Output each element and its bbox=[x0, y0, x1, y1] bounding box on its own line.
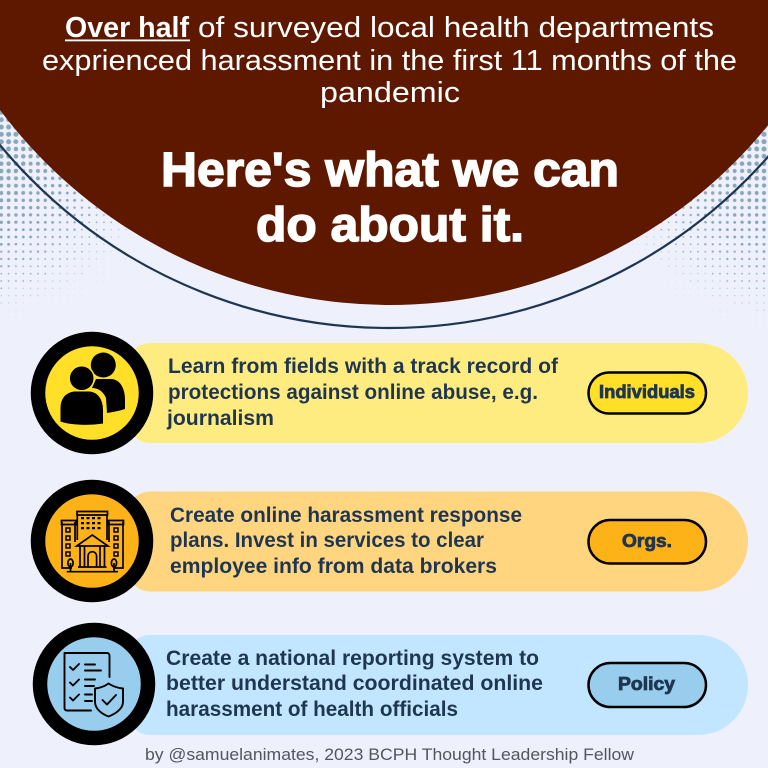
badge: Orgs bbox=[588, 520, 706, 564]
panel background bbox=[128, 343, 748, 443]
panel: orgs bbox=[38, 487, 748, 595]
text: policy action: harassment of health officials bbox=[166, 698, 458, 721]
text: individuals action: Learn from fields with a track record of bbox=[168, 355, 559, 378]
badge: Orgs: Orgs. bbox=[622, 531, 672, 551]
header statement: pandemic bbox=[320, 77, 460, 109]
panel background bbox=[128, 492, 748, 592]
header statement: Over half bbox=[65, 12, 190, 44]
text: policy action bbox=[166, 647, 543, 721]
header statement: of surveyed local health departments bbox=[198, 12, 714, 44]
text: orgs action: Create online harassment response bbox=[170, 504, 522, 527]
header statement: exprienced harassment in the first 11 months of the bbox=[42, 45, 737, 77]
main heading: do about it. bbox=[256, 199, 524, 252]
navy arc line bbox=[0, 0, 768, 328]
main heading bbox=[161, 144, 619, 252]
panel background bbox=[128, 635, 748, 735]
text: individuals action: protections against online abuse, e.g. bbox=[168, 381, 538, 404]
badge: Policy bbox=[588, 663, 706, 707]
text: orgs action: plans. Invest in services to clear bbox=[170, 529, 484, 552]
panel: policy bbox=[40, 630, 748, 738]
footer credit: by @samuelanimates, 2023 BCPH Thought Leadership Fellow bbox=[145, 745, 635, 764]
text: orgs action: employee info from data brokers bbox=[170, 555, 497, 578]
text: individuals action: journalism bbox=[166, 407, 274, 430]
text: policy action: Create a national reporting system to bbox=[166, 647, 539, 670]
halftone dots: left bbox=[0, 0, 188, 328]
brown header shape bbox=[0, 0, 768, 305]
panel: individuals bbox=[38, 339, 748, 447]
text: orgs action bbox=[170, 504, 522, 578]
header statement bbox=[42, 12, 737, 109]
text: policy action: better understand coordinated online bbox=[166, 672, 543, 695]
badge: Individuals: Individuals bbox=[599, 382, 695, 402]
text: individuals action bbox=[166, 355, 559, 430]
halftone dots: right bbox=[580, 0, 768, 333]
badge: Policy: Policy bbox=[618, 674, 675, 694]
badge: Individuals bbox=[588, 372, 706, 414]
main heading: Here's what we can bbox=[161, 144, 619, 197]
icon: checklist and shield bbox=[40, 630, 148, 738]
icon: people bbox=[38, 339, 146, 447]
icon: buildings bbox=[38, 487, 146, 595]
